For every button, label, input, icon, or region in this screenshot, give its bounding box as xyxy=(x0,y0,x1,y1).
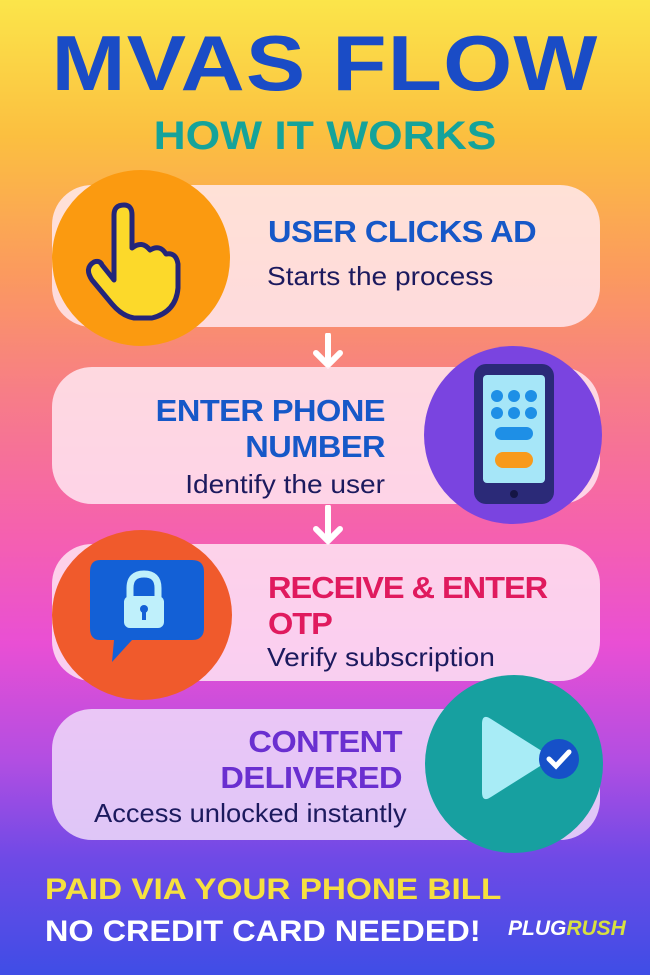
title: MVAS FLOW xyxy=(51,19,598,107)
icon: hand pointer xyxy=(52,170,230,346)
icon: phone xyxy=(424,346,602,524)
heading: content delivered: CONTENT xyxy=(248,724,402,759)
heading: receive & enter otp: RECEIVE & ENTER xyxy=(268,570,547,605)
panel: step 1 xyxy=(52,185,600,327)
footer: no credit card: NO CREDIT CARD NEEDED! xyxy=(45,915,481,948)
heading: receive & enter otp xyxy=(268,570,548,641)
icon: lock message xyxy=(52,530,232,700)
panel: step 2 xyxy=(52,367,600,504)
panel: step 4 xyxy=(52,709,600,840)
heading: enter phone number: ENTER PHONE xyxy=(156,393,385,428)
text: step 2 sub: Identify the user xyxy=(185,469,385,499)
arrow 1 xyxy=(313,333,343,369)
panel: step 3 xyxy=(52,544,600,681)
heading: content delivered: DELIVERED xyxy=(220,760,402,795)
footer: paid via phone bill: PAID VIA YOUR PHONE BILL xyxy=(45,873,501,906)
heading: content delivered xyxy=(220,724,402,795)
icon: play check xyxy=(425,675,603,853)
heading: user clicks ad: USER CLICKS AD xyxy=(268,214,536,249)
text: step 1 sub: Starts the process xyxy=(267,261,493,291)
heading: enter phone number xyxy=(156,393,385,464)
text: step 3 sub: Verify subscription xyxy=(267,642,495,672)
heading: receive & enter otp: OTP xyxy=(268,606,332,641)
logo: plugrush: PLUGRUSH xyxy=(508,917,626,940)
text: step 4 sub: Access unlocked instantly xyxy=(94,798,407,828)
arrow 2 xyxy=(313,505,343,545)
heading: enter phone number: NUMBER xyxy=(245,429,385,464)
subtitle: HOW IT WORKS xyxy=(154,114,496,158)
